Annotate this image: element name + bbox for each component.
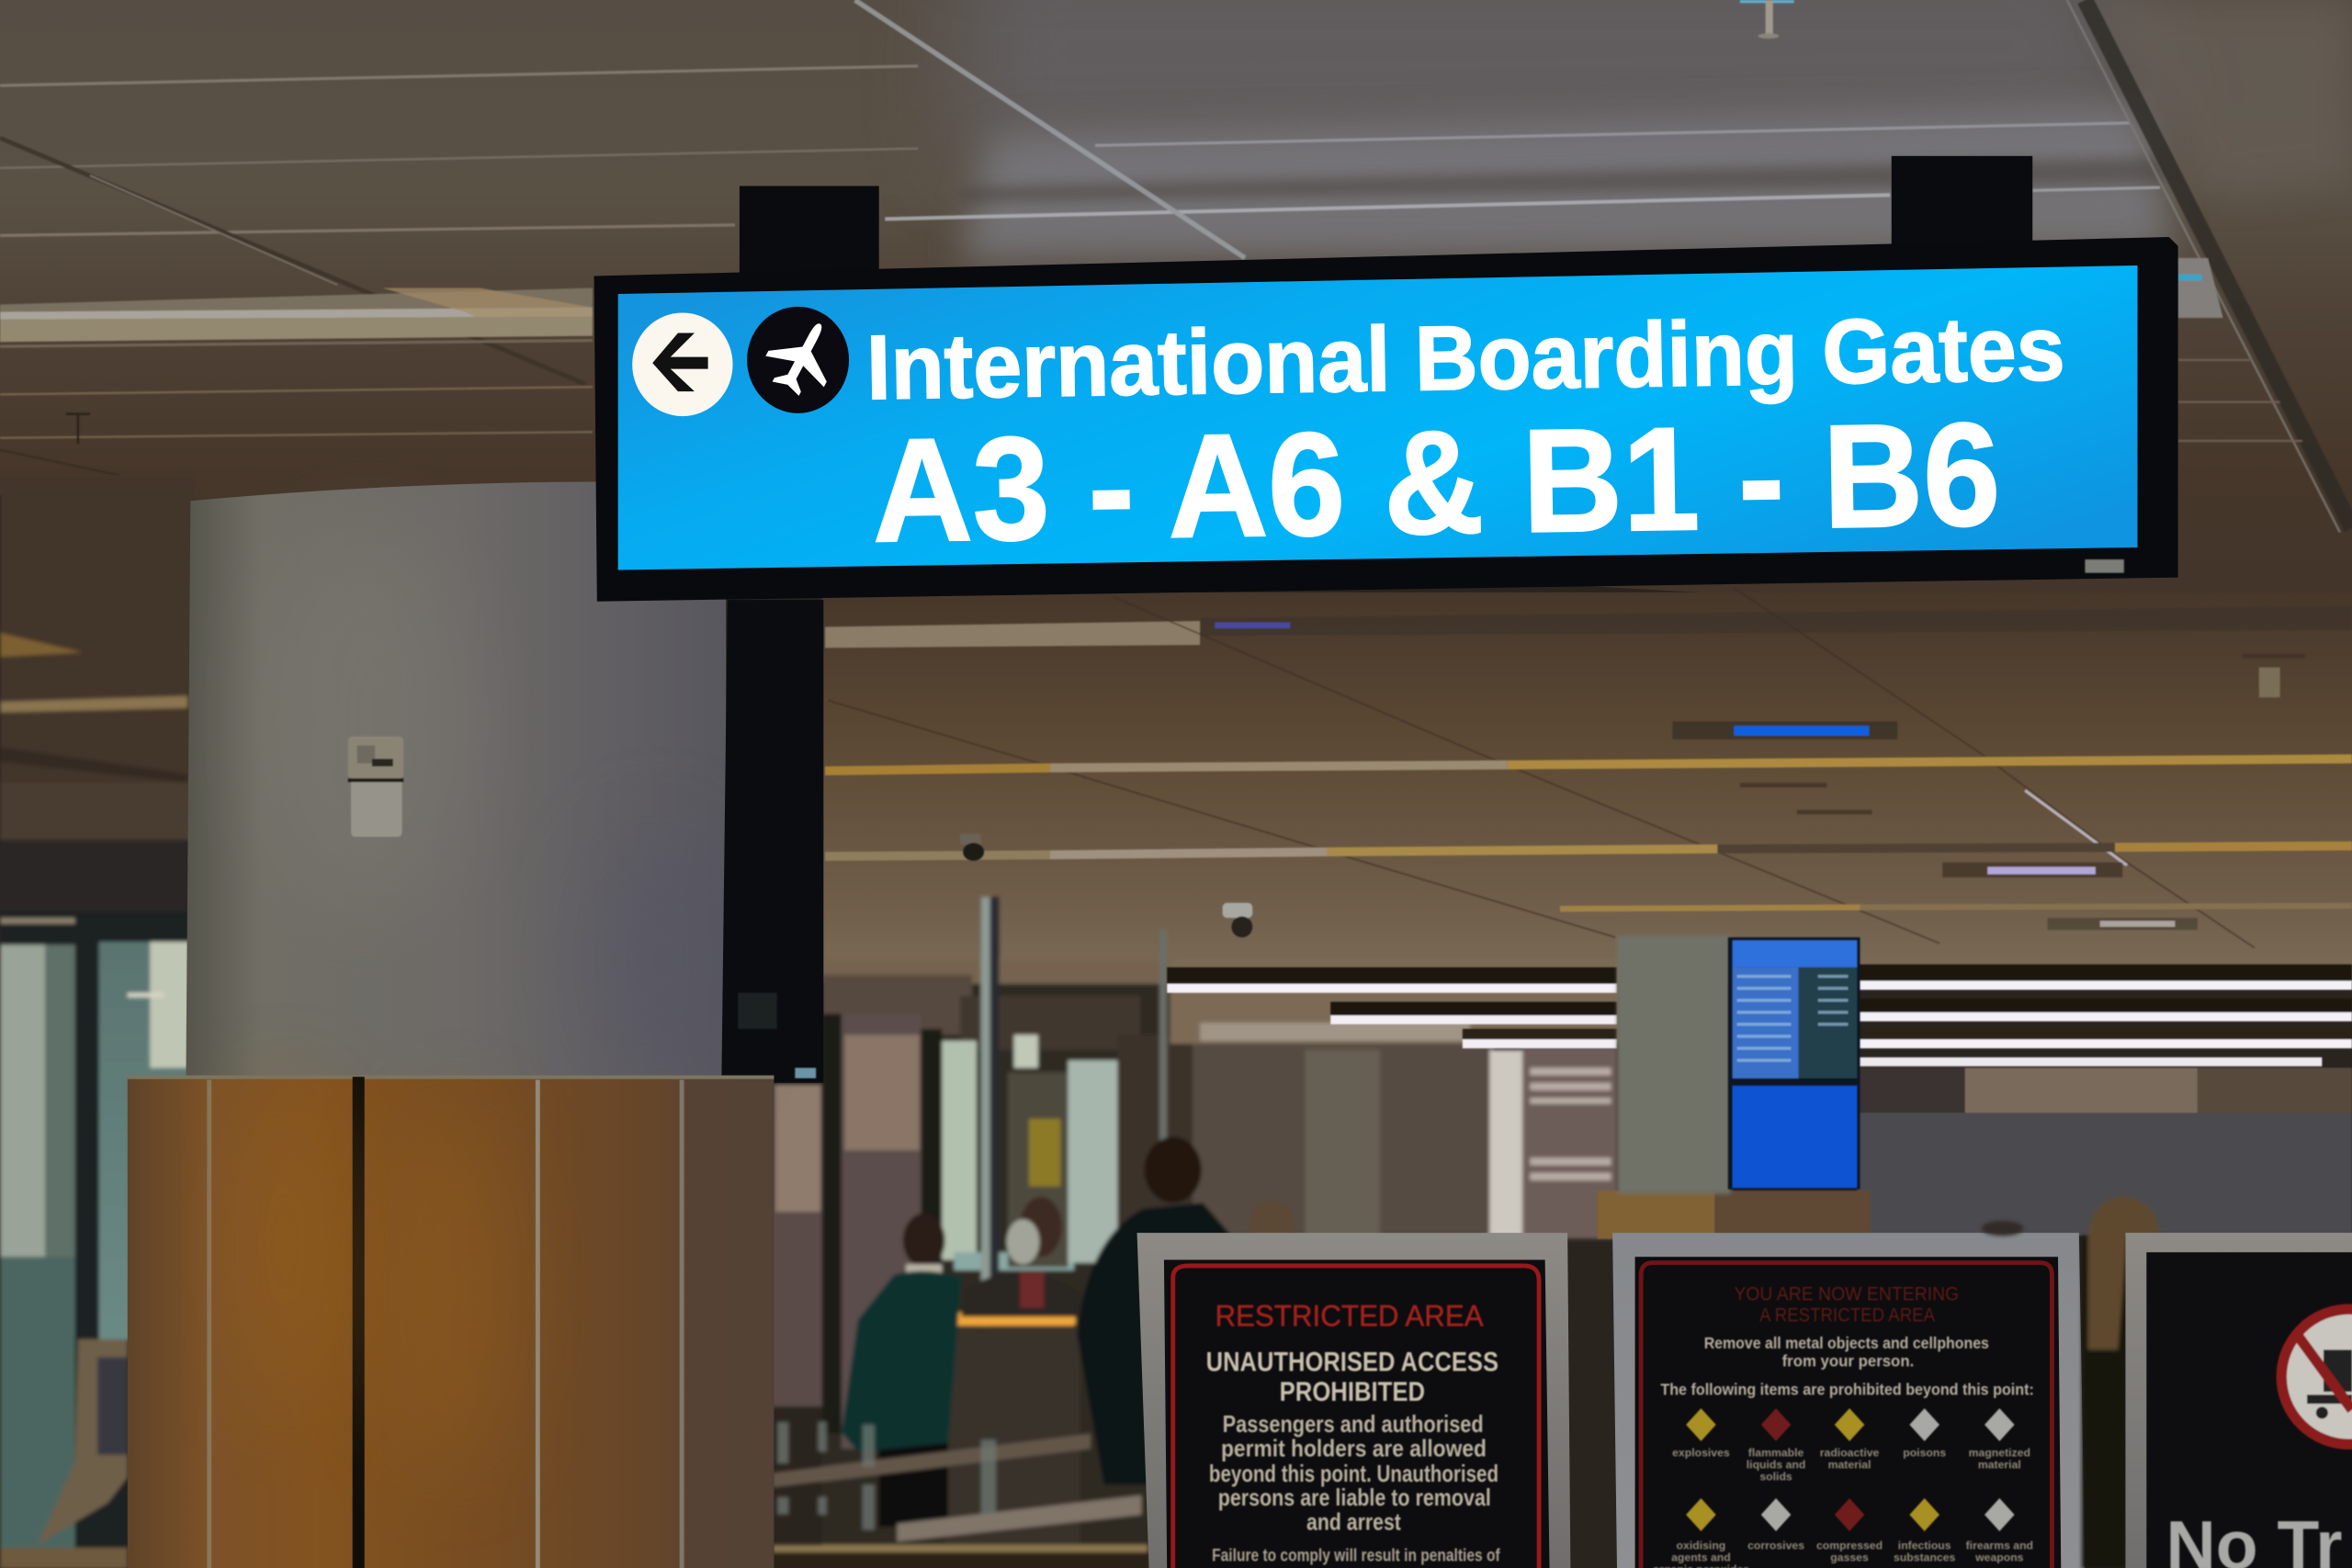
metal objects instructions [1660, 1334, 2034, 1398]
blonde head beyond sign [1250, 1200, 1295, 1247]
lighting strips [1167, 964, 2352, 1066]
sign mounting brackets [740, 156, 2032, 279]
wood-panelled column base [128, 1076, 774, 1568]
ceiling fixture [1740, 0, 1794, 39]
ceiling vents [1672, 721, 1897, 739]
icon: airplane [747, 307, 849, 413]
window blinds wall [770, 1014, 942, 1449]
hazard labels: substances [1894, 1551, 1956, 1564]
hazard labels [1653, 1446, 2033, 1568]
hazard labels: flammable [1748, 1446, 1804, 1459]
person with mask and red scarf [962, 1197, 1083, 1317]
wall-mounted metal unit [348, 737, 403, 837]
upper ceiling [0, 0, 2352, 630]
hazard labels: infectious [1898, 1540, 1951, 1552]
hazard labels: weapons [1974, 1551, 2024, 1564]
hazard labels: corrosives [1747, 1540, 1804, 1552]
illuminated boarding gates sign [594, 237, 2178, 602]
orange barrier light [944, 1313, 1076, 1325]
person in teal jumper [842, 1213, 962, 1527]
metal objects instructions: The following items are prohibited beyond this point: [1660, 1380, 2034, 1398]
access rules text: and arrest [1306, 1507, 1401, 1535]
access rules text: beyond this point. Unauthorised [1209, 1460, 1498, 1487]
check-in kiosk [38, 1339, 128, 1545]
person behind signs [1982, 1197, 2160, 1568]
sign: no trolleys [2125, 1233, 2352, 1568]
access rules text: Passengers and authorised [1223, 1410, 1484, 1438]
flight information display [1728, 937, 1860, 1190]
gate numbers: A3 - A6 & B1 - B6 [871, 391, 2001, 572]
sign heading: International Boarding Gates [865, 298, 2065, 419]
entering restricted area heading: A RESTRICTED AREA [1759, 1304, 1936, 1325]
hazard labels: material [1828, 1458, 1871, 1471]
hazard icons [1686, 1408, 2015, 1531]
restricted area heading: RESTRICTED AREA [1215, 1298, 1484, 1332]
left background with glass doors [0, 477, 195, 1568]
security cameras [960, 834, 1252, 937]
sign: prohibited items [1612, 1233, 2085, 1568]
metal objects instructions: Remove all metal objects and cellphones [1704, 1334, 1989, 1352]
sign blue panel [618, 265, 2138, 570]
hazard labels: explosives [1672, 1446, 1730, 1459]
entering restricted area heading [1734, 1284, 1959, 1325]
entering restricted area heading: YOU ARE NOW ENTERING [1734, 1284, 1959, 1305]
access rules text [1209, 1410, 1498, 1535]
hazard labels: gasses [1830, 1551, 1869, 1564]
unauthorised access notice: UNAUTHORISED ACCESS [1206, 1347, 1498, 1377]
corridor, back wall and people [770, 897, 1620, 1568]
hazard labels: radioactive [1820, 1446, 1880, 1459]
unauthorised access notice: PROHIBITED [1280, 1377, 1425, 1407]
railings [773, 1422, 1148, 1568]
icon: no baggage trolley [2281, 1309, 2352, 1444]
hazard labels: firearms and [1966, 1540, 2033, 1552]
recessed ceiling light left [0, 288, 593, 476]
icon: left arrow [632, 312, 733, 416]
sign: restricted area [1137, 1233, 1570, 1568]
unauthorised access notice [1206, 1347, 1498, 1407]
main grey column [186, 481, 735, 1095]
sign support post [721, 600, 823, 1083]
distant column [1617, 936, 1731, 1194]
man in dark jacket [1077, 1137, 1233, 1484]
hazard labels: liquids and [1747, 1458, 1805, 1471]
hazard labels: magnetized [1969, 1446, 2030, 1459]
access rules text: persons are liable to removal [1218, 1483, 1491, 1511]
hazard labels: poisons [1903, 1446, 1946, 1459]
maker label [2085, 559, 2124, 573]
hazard labels: agents and [1671, 1551, 1731, 1564]
metal objects instructions: from your person. [1782, 1351, 1914, 1370]
hazard labels: compressed [1816, 1540, 1883, 1552]
small wood column base [1598, 1190, 1871, 1239]
sign housing [594, 237, 2178, 602]
ceiling panels and light strips [825, 588, 2352, 948]
right background wall [1167, 964, 2352, 1239]
access rules text: permit holders are allowed [1221, 1434, 1487, 1461]
hazard labels: oxidising [1677, 1540, 1725, 1552]
hazard labels: material [1978, 1458, 2021, 1471]
right ceiling strip [2178, 258, 2302, 441]
penalties text: Failure to comply will result in penalties of [1212, 1546, 1500, 1566]
glass doors [942, 1035, 1117, 1270]
hazard labels: solids [1759, 1470, 1792, 1483]
mid ceiling [822, 588, 2352, 982]
